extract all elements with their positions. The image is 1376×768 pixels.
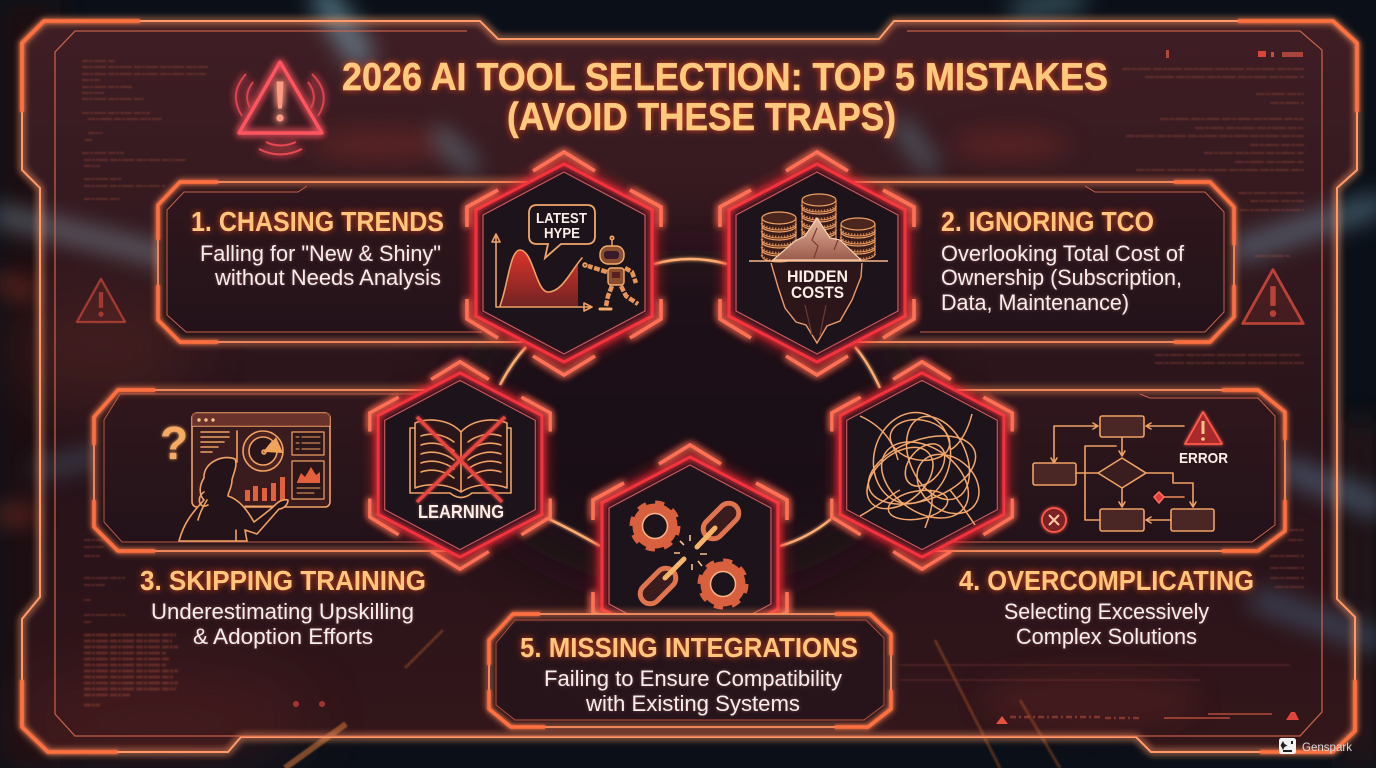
- code lines: left: [82, 61, 208, 705]
- icon: main warning triangle: [236, 62, 324, 154]
- icon: tangled scribble: [855, 404, 991, 534]
- chart: [492, 234, 592, 311]
- text 2: Data, Maintenance): [941, 290, 1129, 315]
- heading 5: 5. MISSING INTEGRATIONS: [520, 632, 858, 663]
- code lines: right: [1122, 69, 1304, 587]
- text 2: [941, 241, 1185, 315]
- text 4: Complex Solutions: [1016, 624, 1197, 649]
- text 1: without Needs Analysis: [214, 265, 441, 290]
- text 2: Ownership (Subscription,: [941, 265, 1182, 290]
- icon: gears: [632, 504, 746, 606]
- icon: book: [410, 420, 511, 498]
- heading 2: 2. IGNORING TCO: [941, 206, 1154, 237]
- title: (AVOID THESE TRAPS): [507, 96, 896, 139]
- icon: iceberg: COSTS: [791, 284, 844, 302]
- text 1: [200, 241, 441, 290]
- text 2: Overlooking Total Cost of: [941, 241, 1185, 266]
- text 4: [1004, 599, 1209, 649]
- illustration: person at dashboard: [179, 413, 330, 541]
- icon: robot: [583, 236, 638, 309]
- text 5: with Existing Systems: [585, 691, 800, 716]
- text 3: Underestimating Upskilling: [151, 599, 414, 624]
- watermark: Genspark: [1302, 740, 1353, 754]
- watermark: [1279, 738, 1353, 754]
- label: error: ERROR: [1179, 450, 1228, 467]
- icon: red cross: [417, 417, 505, 502]
- speech bubble: [529, 205, 595, 258]
- text 3: & Adoption Efforts: [193, 624, 373, 649]
- title: [342, 56, 1108, 139]
- panel 5: [489, 614, 891, 727]
- faint warning triangle left: [77, 279, 125, 322]
- icon: broken chain: [636, 499, 743, 608]
- heading 3: 3. SKIPPING TRAINING: [140, 565, 426, 596]
- speech bubble: HYPE: [544, 225, 580, 242]
- icon: iceberg: HIDDEN: [787, 268, 848, 286]
- speech bubble: LATEST: [536, 210, 587, 227]
- text 5: [544, 666, 842, 716]
- icon: iceberg: [749, 218, 888, 343]
- faint warning triangle right: [1243, 270, 1303, 324]
- hexagon 5: [593, 445, 787, 668]
- icon: error triangle: [1185, 412, 1222, 444]
- hexagon 1: [467, 152, 661, 375]
- hexagon 2: [720, 152, 914, 375]
- text 1: Falling for "New & Shiny": [200, 241, 441, 266]
- hexagon 4: [832, 362, 1012, 569]
- status bar: [293, 50, 1303, 724]
- icon: coins: [762, 194, 875, 262]
- text 4: Selecting Excessively: [1004, 599, 1209, 624]
- heading 1: 1. CHASING TRENDS: [191, 206, 444, 237]
- panel 2: [835, 182, 1234, 342]
- flowchart: [1033, 416, 1214, 531]
- icon: question mark: ?: [160, 417, 188, 469]
- title: 2026 AI TOOL SELECTION: TOP 5 MISTAKES: [342, 56, 1108, 99]
- panel 3: [94, 390, 480, 551]
- heading 4: 4. OVERCOMPLICATING: [959, 565, 1254, 596]
- text 5: Failing to Ensure Compatibility: [544, 666, 842, 691]
- connector arcs: [500, 259, 880, 546]
- label: learning: LEARNING: [418, 502, 504, 522]
- icon: x circle: [1042, 508, 1066, 532]
- hexagon 3: [370, 362, 550, 569]
- text 3: [151, 599, 414, 649]
- panel 1: [158, 182, 545, 342]
- panel 4: [925, 390, 1285, 649]
